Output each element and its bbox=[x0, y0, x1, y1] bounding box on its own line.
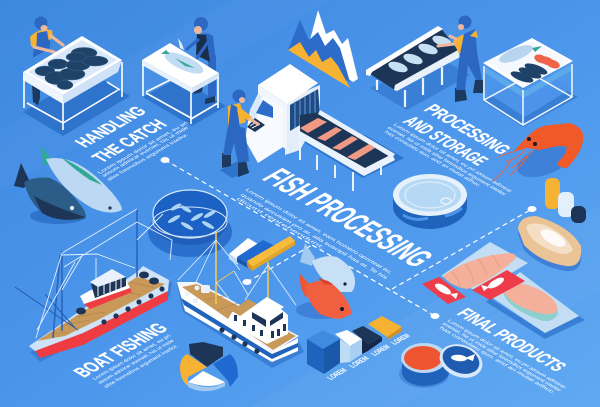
cargo bbox=[184, 285, 210, 303]
worker 4 bbox=[438, 16, 483, 102]
deck gear bbox=[76, 272, 159, 314]
salmon conveyor belt bbox=[298, 110, 395, 191]
ship cabin bbox=[84, 288, 132, 309]
heading: processing and storage: AND STORAGE bbox=[398, 114, 492, 169]
panel: fishing boat 2 bbox=[177, 232, 304, 368]
heading: handling the catch: HANDLING bbox=[71, 104, 152, 151]
text block: fish processing body: dicunt reprehendunt. bbox=[234, 197, 326, 250]
fish label icons bbox=[433, 275, 506, 299]
tyres bbox=[101, 286, 165, 325]
icon: tin can bbox=[393, 174, 467, 229]
panel: display table with fish bbox=[483, 38, 578, 127]
icon: red fish bbox=[296, 273, 352, 319]
text block: boat fishing body: Lorem ipsum dolor sit amet, eu pri bbox=[92, 334, 173, 381]
text block: boat fishing body: assum admirar eveniet, his ut mide bbox=[97, 339, 176, 385]
chart labels bbox=[325, 332, 413, 381]
text block: handling body: Lorem ipsum dolor sit amet, eu pri bbox=[97, 121, 190, 175]
panel: worker with cutting table bbox=[142, 17, 226, 126]
chart: isometric bars by the boats bbox=[229, 236, 295, 271]
text block: handling body: alise forensibus argument intellor. bbox=[106, 133, 190, 182]
heading: boat fishing: BOAT FISHING bbox=[69, 320, 173, 381]
text block: fish processing body: Lorem ipsum dolor sit amet, eam homero oporteat eu, bbox=[243, 188, 394, 275]
machine body bbox=[285, 85, 320, 155]
worker 2 bbox=[178, 17, 216, 104]
connector dots bbox=[160, 157, 536, 319]
heading: handling the catch bbox=[71, 104, 172, 166]
fish on belt bbox=[387, 34, 453, 74]
icon: light tuna fish bbox=[40, 145, 122, 213]
panel: worker at fish conveyor bbox=[366, 16, 483, 110]
icon: dark tuna fish bbox=[14, 163, 86, 224]
light fish on table bbox=[161, 48, 206, 78]
text block: processing body: eveniet, his ut mide alise forensibus argument intellor bbox=[385, 126, 508, 197]
ship cabin 2 bbox=[227, 297, 288, 344]
chart: pie bbox=[180, 342, 238, 391]
text block: final products body: eveniet, his ut mide alise forensibus argument intellor bbox=[440, 322, 563, 393]
worker 1 bbox=[30, 16, 63, 105]
panel: worker with crate table bbox=[23, 16, 130, 136]
text block: boat fishing body: alise forensibus argument intellor. bbox=[103, 344, 180, 389]
heading: processing and storage: PROCESSING bbox=[419, 102, 515, 158]
masts bbox=[178, 232, 296, 305]
icon: oyster bbox=[518, 216, 581, 271]
text block: handling body bbox=[97, 121, 191, 182]
salmon fillets bbox=[443, 253, 516, 289]
text block: processing body: has consulatu quo, and an mutat adhuc. bbox=[382, 130, 483, 188]
text block: handling body: assum admirar eveniet, his ut mide bbox=[101, 126, 191, 178]
heading: processing and storage bbox=[398, 102, 515, 169]
chart labels: LOREM bbox=[325, 367, 349, 381]
text block: processing body: Lorem ipsum dolor sit amet, eu pri assum admirar bbox=[391, 123, 514, 194]
heading: fish processing: FISH PROCESSING bbox=[254, 164, 441, 272]
mast and rigging bbox=[15, 209, 172, 338]
tyres 2 bbox=[219, 327, 260, 354]
console bbox=[245, 94, 283, 163]
worker 3 bbox=[222, 90, 258, 177]
panel: machine with worker and salmon conveyor bbox=[220, 64, 404, 191]
icon: small cylinders bbox=[545, 178, 586, 223]
icon: light fish bbox=[300, 243, 355, 292]
chart labels: LOREM bbox=[347, 355, 371, 369]
text block: boat fishing body bbox=[92, 334, 180, 389]
panel: salmon trays bbox=[422, 242, 585, 339]
chart: mountain area graph bbox=[288, 10, 358, 88]
text block: final products body: has consulatu quo, and an mutat adhuc. bbox=[437, 326, 557, 395]
text block: fish processing body bbox=[234, 188, 394, 280]
text block: fish processing body: quando accusam pro at, alia suscipit has at. Te his bbox=[238, 193, 389, 280]
panel: fishing boat 1 bbox=[15, 209, 172, 362]
chart labels: LOREM bbox=[389, 332, 413, 346]
icon: caviar tins bbox=[399, 338, 487, 388]
icon: shrimp bbox=[493, 123, 583, 184]
heading: handling the catch: THE CATCH bbox=[88, 117, 172, 166]
fish on display bbox=[497, 42, 561, 85]
dark fish pile bbox=[35, 48, 108, 90]
chart: isometric cube bars bbox=[307, 316, 402, 374]
red labels bbox=[422, 277, 466, 304]
dashed connector lines bbox=[165, 160, 532, 316]
text block: final products body: Lorem ipsum dolor sit amet, eu pri assum admirar bbox=[445, 319, 568, 390]
farmed fish bbox=[167, 202, 217, 231]
icon: fish farm tank bbox=[148, 190, 232, 257]
chart labels: LOREM bbox=[369, 343, 393, 357]
